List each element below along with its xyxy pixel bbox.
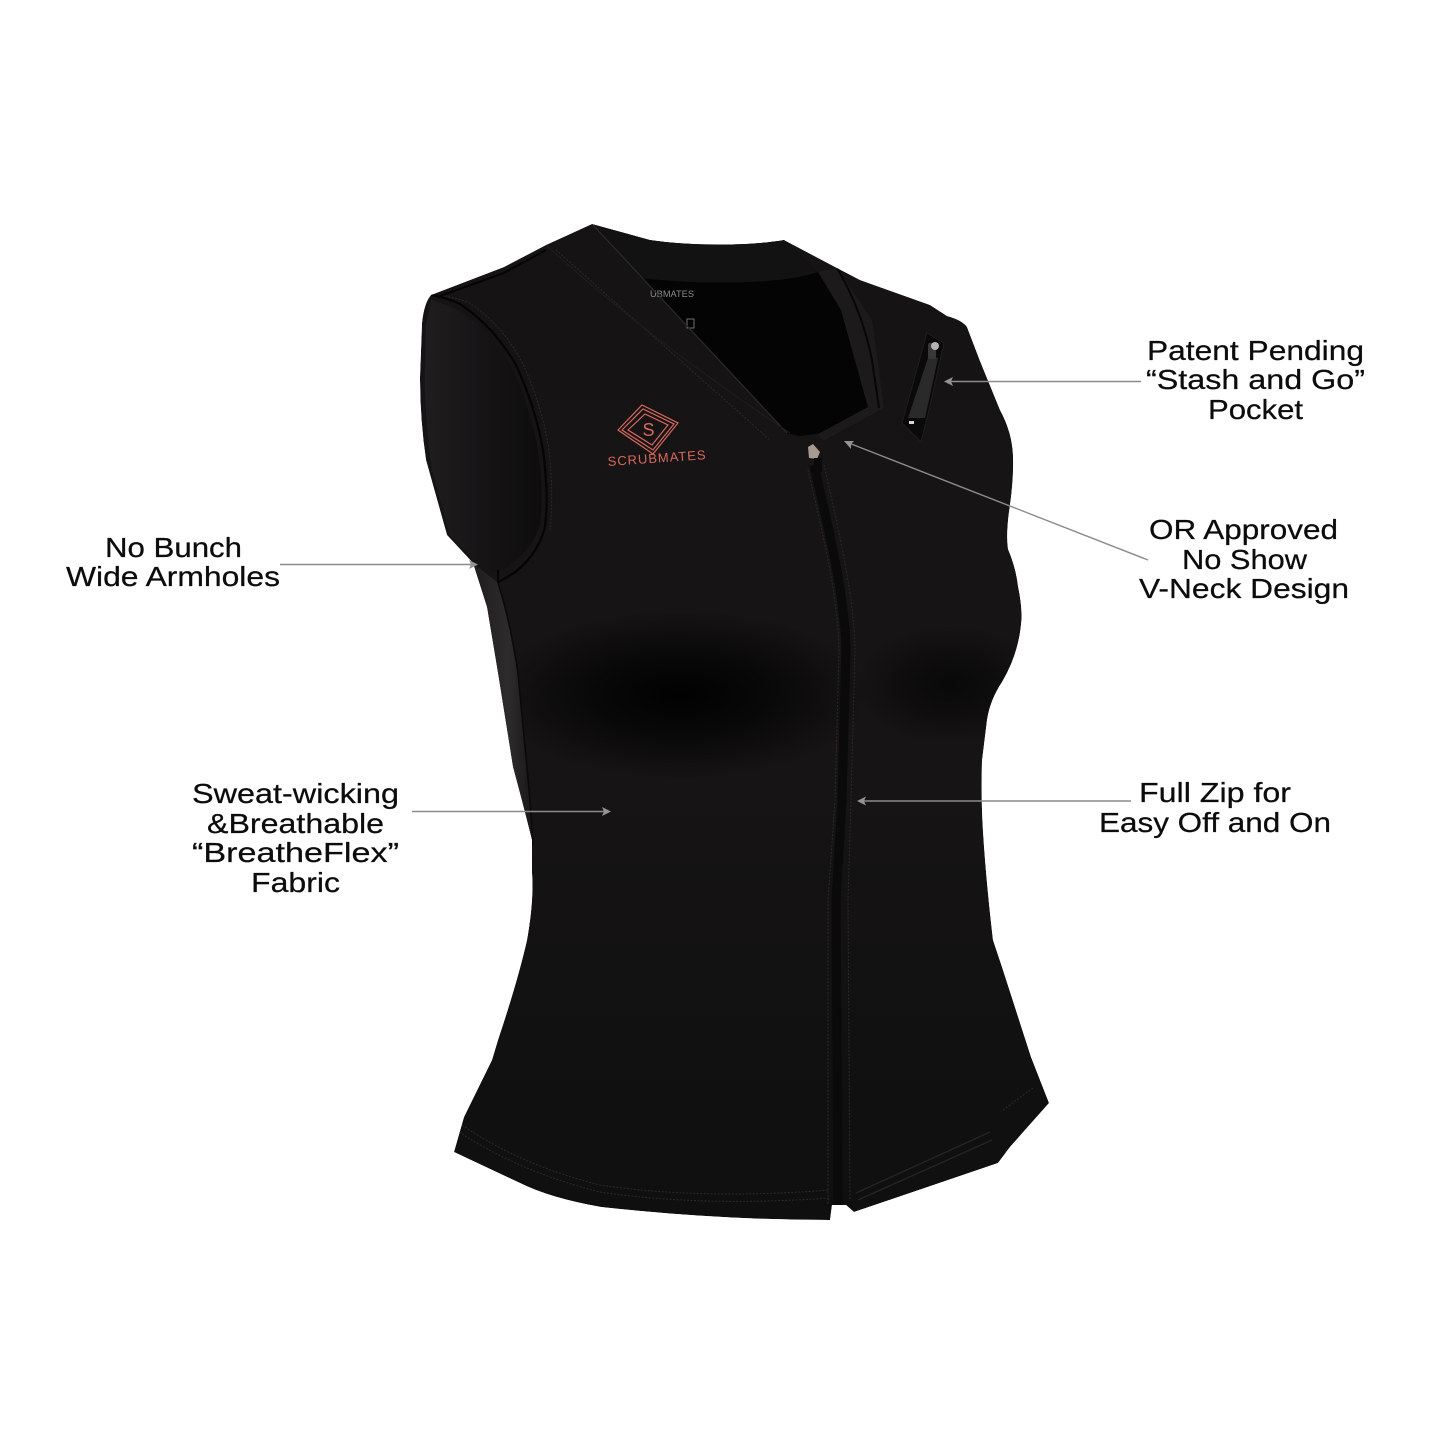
inner neck tag: UBMATES [650,289,694,299]
fabric label: Fabric [251,867,340,898]
logo wordmark: SCRUBMATES [607,447,706,469]
arrow: armholes [280,560,478,569]
logo diamond [618,405,678,454]
pocket label: Patent Pending [1147,335,1364,366]
v-neck label: No Show [1182,544,1308,575]
pocket label: “Stash and Go” [1146,364,1365,395]
neck opening [592,224,868,436]
callout: pocket [944,335,1365,425]
vest garment [420,224,1049,1220]
shoulder seam [440,250,546,296]
callout: fabric [192,778,611,898]
callout: zip [857,777,1331,838]
callout: v-neck [844,441,1349,604]
logo [607,405,706,469]
armhole trim [431,295,547,582]
arrow: zip [857,796,1131,806]
zip label: Easy Off and On [1099,807,1331,838]
side seam [498,583,533,845]
zip label: Full Zip for [1139,777,1291,808]
right collar band [820,276,867,434]
left collar line [592,224,787,433]
armholes label: No Bunch [105,532,242,563]
logo letter: S [642,420,655,440]
pocket zip pull [928,343,936,359]
pocket label: Pocket [1208,394,1303,425]
side panel [473,563,532,840]
armhole inner [425,300,437,475]
v-neck label: OR Approved [1149,514,1338,545]
fabric label: &Breathable [207,808,384,839]
arrow: pocket [944,377,1141,386]
fabric label: Sweat-wicking [192,778,399,809]
pocket [902,333,944,442]
arrow: v-neck [844,441,1148,560]
inner tag icon [687,319,694,328]
armholes label: Wide Armholes [66,561,280,592]
vest body silhouette [420,224,1049,1220]
callout: armholes [66,532,478,592]
arrow: fabric [412,807,611,816]
zipper [808,444,855,1207]
shadow: chest fold [558,640,802,750]
fabric label: “BreatheFlex” [192,837,399,868]
v-neck label: V-Neck Design [1139,573,1349,604]
hem stitching [462,1125,830,1194]
shadow: under bust [912,654,1015,730]
zip slider [808,444,820,459]
inner back collar [592,224,818,283]
